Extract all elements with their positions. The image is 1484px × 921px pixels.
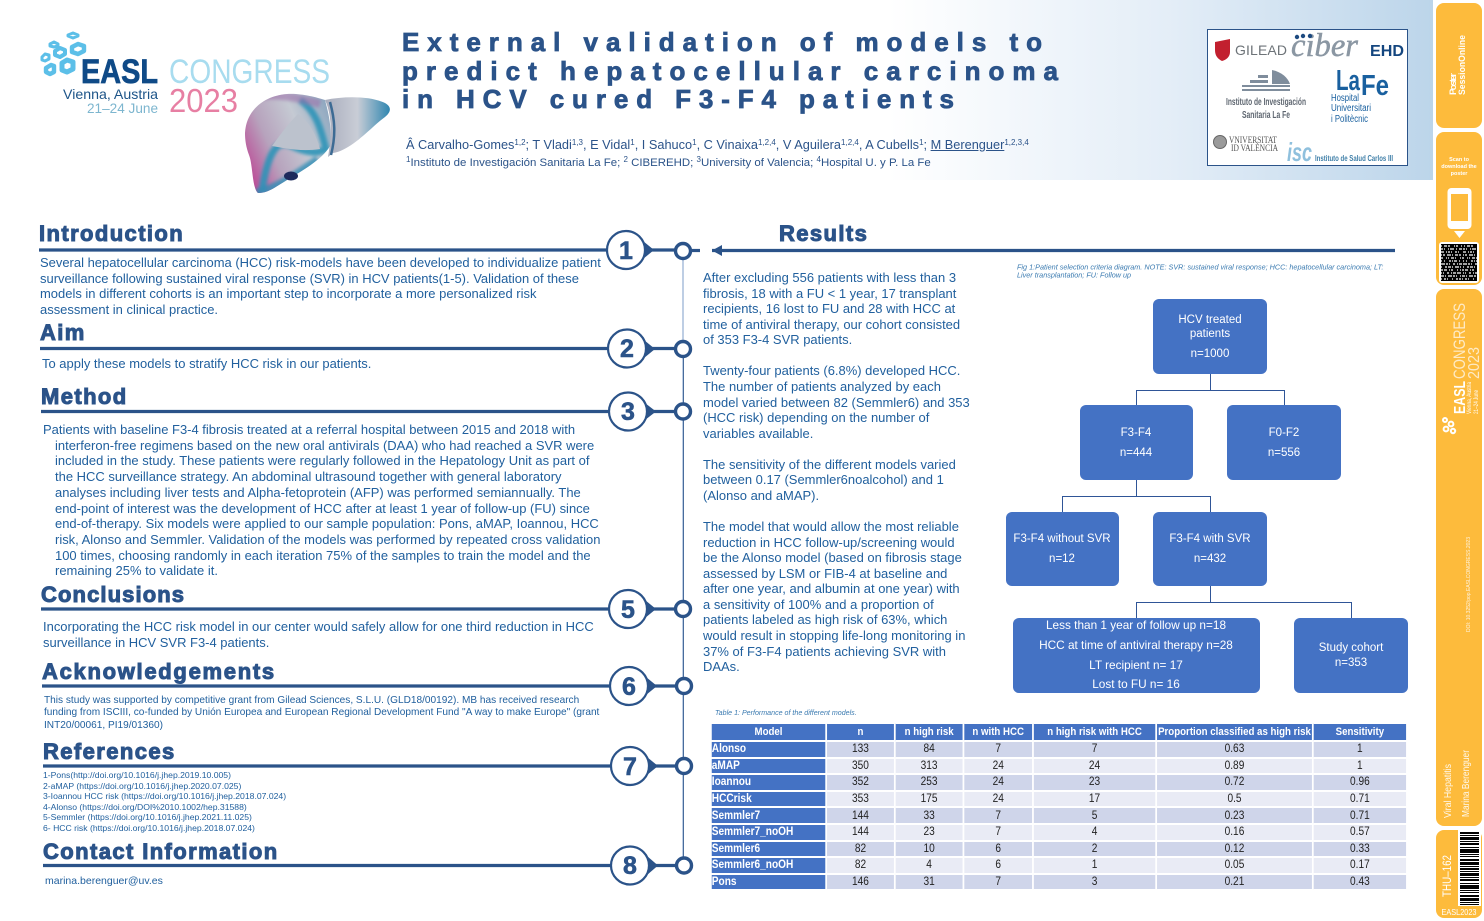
institutional logos box: [1208, 28, 1408, 167]
table: model performance: n with HCC: [972, 726, 1024, 738]
Instituto de Salud Carlos III: Instituto de Salud Carlos III: [1315, 154, 1393, 163]
EASL2023: EASL2023: [1442, 907, 1477, 917]
La Fe logo: Fe: [1361, 70, 1389, 102]
table: model performance: 0.89: [1225, 760, 1244, 772]
table caption: Table 1: Performance of the different models.: [715, 709, 857, 717]
Instituto de Investigacion text: Sanitaria La Fe: [1242, 110, 1290, 121]
EASL Congress logo: [42, 33, 330, 119]
text: results: After excluding 556 patients with less than 3: [703, 270, 956, 285]
dates: 21–24 June: [87, 100, 158, 116]
section marker 3: [609, 392, 690, 430]
text: acknowledgements: [44, 695, 600, 731]
text: results: 37% of F3-F4 patients achieving SVR with: [703, 644, 946, 658]
table: model performance: 31: [923, 876, 935, 888]
rotated congress branding: 21–24 June: [1474, 390, 1480, 414]
icon: EASL hexagons: [42, 33, 84, 74]
text: introduction: models in different cohorts is an important step to incorporate a more personalized risk: [40, 286, 536, 301]
topic: Viral Hepatitis: [1443, 764, 1454, 818]
text: results: The sensitivity of the different models varied: [703, 457, 956, 472]
text: method: remaining 25% to validate it.: [55, 563, 218, 578]
text: acknowledgements: funding from ISCIII, co-funded by Unión Europea and European Regional Development Fund "A way to make Europe" (grant: [44, 707, 599, 718]
sidebar tab: congress details: [1436, 289, 1483, 826]
table: model performance: 352: [852, 776, 869, 788]
patient selection flow diagram: [1006, 299, 1408, 693]
Universitat de Valencia: [1229, 135, 1278, 153]
heading: References: References: [43, 739, 176, 764]
box: F3-F4 without SVR: n=12: [1049, 553, 1075, 565]
icon: down arrow: [1454, 231, 1465, 238]
text: results: assessed by LSM or FIB-4 at baseline and: [703, 566, 947, 581]
year: 2023: [169, 82, 238, 119]
scan instruction: [1441, 157, 1477, 177]
text: results: Twenty-four patients (6.8%) developed HCC.: [703, 363, 960, 378]
table: model performance: n high risk with HCC: [1047, 726, 1142, 738]
icon: liver illustration: [245, 94, 390, 193]
section marker 2: [608, 330, 690, 368]
text: introduction: assessment in clinical practice.: [40, 302, 218, 317]
rotated congress branding: 2023: [1466, 347, 1483, 379]
section marker 1: 1: [619, 237, 633, 265]
text: results: recipients, 16 lost to FU and 28 with HCC at: [703, 301, 955, 316]
text: references: 1-Pons(http://doi.org/10.1016/j.jhep.2019.10.005): [43, 770, 231, 780]
text: results: (Alonso and aMAP).: [703, 488, 819, 503]
icon: ISCIII mark: isc: [1287, 137, 1312, 167]
table: model performance: 133: [852, 743, 869, 755]
table: model performance: 24: [993, 760, 1004, 772]
sidebar tab: poster session online: [1436, 3, 1482, 128]
text: conclusions: Incorporating the HCC risk model in our center would safely allow for one third reduction in HCC: [43, 619, 594, 634]
table: model performance: 313: [921, 760, 938, 772]
table: model performance: HCCrisk: [712, 793, 752, 805]
presenter: Marina Berenguer: [1461, 749, 1472, 817]
section marker 5: [609, 590, 690, 628]
text: references: 3-Ioannou HCC risk (https://doi.org/10.1016/j.jhep.2018.07.024): [43, 791, 286, 801]
poster number: THU–162: [1440, 855, 1454, 897]
text: references: 5-Semmler (https://doi.org/10.1016/j.jhep.2021.11.025): [43, 812, 252, 822]
table: model performance: aMAP: [712, 760, 740, 772]
figure caption: [1017, 262, 1383, 280]
table: model performance: 7: [1092, 743, 1097, 755]
text: introduction: surveillance following sustained viral response (SVR) in HCV patients(1-5). Validation of these: [40, 271, 579, 286]
icon: ciber dots: [1295, 34, 1312, 39]
icon: phone: [1448, 188, 1472, 229]
text: method: end-of-therapy. Six models were applied to our sample population: Pons, aMAP, Ioannou, HCC: [55, 516, 599, 531]
icon: Gilead shield: [1215, 39, 1230, 61]
section marker 6: 6: [622, 673, 636, 701]
table: model performance: 0.23: [1225, 810, 1244, 822]
table: model performance: n high risk: [905, 726, 954, 738]
section marker 7: 7: [623, 753, 637, 781]
rotated congress branding: EASL: [1452, 381, 1469, 414]
table: model performance: 0.71: [1350, 793, 1370, 805]
text: references: 4-Alonso (https://doi.org/DOI%2010.1002/hep.31588): [43, 802, 247, 812]
text: results: reduction in HCC follow-up/screening would: [703, 535, 955, 550]
La Fe logo: Hospital: [1331, 93, 1359, 104]
table: model performance: 7: [995, 876, 1001, 888]
text: introduction: [40, 255, 601, 317]
box: F3-F4 with SVR: F3-F4 with SVR: [1169, 533, 1251, 545]
box: F3-F4 without SVR: [1006, 512, 1119, 586]
table: model performance: n: [858, 726, 863, 738]
text: results: of 353 F3-4 SVR patients.: [703, 332, 852, 347]
table: model performance: 146: [852, 876, 869, 888]
rotated congress branding: CONGRESS: [1450, 303, 1469, 379]
section marker 7: [611, 747, 692, 785]
DOI: DOI: 10.3252/pop.EASLCONGRESS.2023: [1466, 537, 1472, 632]
box: study cohort: n=353: [1335, 657, 1367, 669]
title: External validation of models to: [402, 27, 1042, 57]
table: model performance: 3: [1092, 876, 1097, 888]
box: F3-F4 with SVR: [1153, 512, 1267, 586]
table: model performance: 1: [1357, 760, 1363, 772]
text: results: model varied between 82 (Semmler6) and 353: [703, 394, 970, 410]
La Fe logo: La: [1336, 65, 1361, 97]
box: study cohort: [1294, 618, 1408, 693]
section marker 5: 5: [621, 596, 635, 624]
table: model performance: 82: [855, 859, 866, 871]
table: model performance: 23: [1089, 776, 1100, 788]
heading: Aim: Aim: [40, 320, 86, 345]
table: model performance: 0.96: [1350, 776, 1370, 788]
table: model performance: Semmler7: [712, 810, 760, 822]
text: results: patients labeled as high risk of 63%, which: [703, 612, 947, 627]
icon: institute building: [1242, 70, 1290, 91]
section marker 8: 8: [623, 852, 637, 880]
table: model performance: 144: [852, 810, 869, 822]
EASL wordmark: EASL: [81, 53, 158, 91]
Universitat de Valencia: ID VALÈNCIA: [1231, 143, 1278, 153]
box: HCV treated patients: patients: [1190, 328, 1230, 340]
section marker 1: [607, 231, 690, 269]
table: model performance: 0.17: [1350, 859, 1370, 871]
text: method: interferon-free regimens based on the new oral antivirals (DAA) who had reached a SVR were: [55, 438, 594, 453]
text: method: 100 times, choosing randomly in each iteration 75% of the samples to train the model and the: [55, 548, 591, 563]
box: F3-F4: F3-F4: [1121, 427, 1152, 439]
text: results: variables available.: [703, 426, 813, 441]
section marker 8: [611, 846, 692, 884]
table: model performance: 4: [926, 859, 932, 871]
box: HCV treated patients: [1153, 299, 1267, 374]
section marker 2: 2: [620, 335, 634, 363]
heading: Introduction: Introduction: [39, 221, 184, 246]
arrow: results pointer: [712, 245, 722, 256]
text: results: time of antiviral therapy, our cohort consisted: [703, 317, 960, 332]
box: exclusions: [1013, 618, 1260, 693]
table: model performance: 10: [923, 843, 935, 855]
box: exclusions: HCC at time of antiviral therapy n=28: [1039, 638, 1233, 652]
scan instruction: Scan to: [1449, 157, 1470, 163]
table: model performance: 0.5: [1227, 793, 1242, 805]
text: results: fibrosis, 18 with a FU < 1 year, 17 transplant: [703, 286, 956, 301]
scan instruction: download the: [1441, 164, 1477, 170]
Instituto de Investigacion text: Instituto de Investigación: [1226, 97, 1306, 108]
table: model performance: [712, 723, 1406, 889]
Universitat de Valencia: VNIVERSITAT: [1229, 135, 1277, 145]
table: model performance: 0.21: [1225, 876, 1244, 888]
EHD: EHD: [1370, 43, 1404, 60]
table: model performance: 0.12: [1225, 843, 1244, 855]
table: model performance: Sensitivity: [1336, 726, 1384, 738]
text: results: [703, 270, 970, 674]
text: results: a sensitivity of 100% and a proportion of: [703, 597, 934, 612]
box: exclusions: LT recipient n= 17: [1089, 658, 1183, 672]
table: model performance: 23: [923, 826, 935, 838]
text: results: would result in stopping life-long monitoring in: [703, 628, 965, 643]
table: model performance: 0.63: [1225, 743, 1244, 755]
text: results: be the Alonso model (based on fibrosis stage: [703, 550, 962, 565]
box: HCV treated patients: HCV treated: [1178, 314, 1242, 326]
ciber: ciber: [1291, 28, 1358, 64]
table: model performance: 6: [995, 859, 1001, 871]
table: model performance: 84: [923, 743, 935, 755]
figure caption: Fig 1:Patient selection criteria diagram. NOTE: SVR: sustained viral response; HCC: hepatocellular carcinoma; LT:: [1017, 262, 1383, 272]
figure caption: Liver transplantation; FU: Follow up: [1017, 270, 1131, 280]
text: method: [43, 422, 600, 578]
box: F3-F4 without SVR: F3-F4 without SVR: [1013, 533, 1111, 545]
heading: Method: Method: [41, 384, 128, 409]
table: model performance: Alonso: [712, 743, 746, 755]
table: model performance: Semmler6_noOH: [712, 859, 793, 871]
table: model performance: Semmler7_noOH: [712, 826, 793, 838]
box: exclusions: Lost to FU n= 16: [1092, 677, 1180, 691]
text: contact: marina.berenguer@uv.es: [45, 875, 163, 887]
text: acknowledgements: This study was supported by competitive grant from Gilead Sciences, S.L.U. (GLD18/00192). MB has received research: [44, 695, 579, 706]
QR code: [1439, 242, 1479, 283]
text: method: the HCC surveillance strategy. An abdominal ultrasound together with general laboratory: [55, 469, 562, 484]
table: model performance: 1: [1092, 859, 1097, 871]
header background band: [0, 0, 1433, 180]
title: predict hepatocellular carcinoma: [402, 56, 1059, 86]
heading: Conclusions: Conclusions: [41, 582, 185, 607]
authors: Â Carvalho-Gomes1,2; T Vladi1,3, E Vidal1, I Sahuco1, C Vinaixa1,2,4, V Aguilera1,2,4, A Cubells1; M Berenguer1,2,3,4: [406, 137, 1029, 152]
flow connectors: [1062, 374, 1352, 618]
table: model performance: 2: [1092, 843, 1097, 855]
box: F0-F2: [1227, 405, 1341, 480]
box: F3-F4: [1080, 405, 1193, 480]
La Fe logo: Universitari: [1331, 103, 1371, 114]
table: model performance: 82: [855, 843, 866, 855]
table: model performance: 33: [923, 810, 935, 822]
icon: university seal: [1214, 136, 1226, 148]
sidebar tab: scan to download: [1436, 132, 1482, 285]
affiliations: 1Instituto de Investigación Sanitaria La Fe; 2 CIBEREHD; 3University of Valencia; 4Hospital U. y P. La Fe: [406, 154, 931, 168]
table: model performance: 0.33: [1350, 843, 1370, 855]
Gilead: GILEAD: [1235, 42, 1287, 58]
La Fe logo: i Politècnic: [1331, 114, 1368, 125]
table: model performance: 0.43: [1350, 876, 1370, 888]
section marker 3: 3: [621, 398, 635, 426]
box: F3-F4 with SVR: n=432: [1194, 553, 1226, 565]
text: results: (HCC risk) depending on the number of: [703, 410, 929, 425]
table: model performance: 17: [1089, 793, 1100, 805]
text: references: 2-aMAP (https://doi.org/10.1016/j.jhep.2020.07.025): [43, 781, 241, 791]
text: introduction: Several hepatocellular carcinoma (HCC) risk-models have been developed to individualize patient: [40, 255, 601, 270]
text: acknowledgements: INT20/00061, PI19/01360): [44, 720, 163, 731]
table: model performance: Semmler6: [712, 843, 760, 855]
text: results: between 0.17 (Semmler6noalcohol) and 1: [703, 472, 944, 487]
table: model performance: 5: [1092, 810, 1097, 822]
sidebar tab: poster number and barcode: [1436, 830, 1482, 918]
table: model performance: 0.57: [1350, 826, 1370, 838]
table: model performance: 7: [995, 826, 1001, 838]
table: model performance: 24: [1089, 760, 1100, 772]
CONGRESS wordmark: CONGRESS: [169, 53, 330, 91]
title: [402, 27, 1059, 114]
heading: Acknowledgements: Acknowledgements: [42, 659, 276, 684]
rotated congress branding: Vienna, Austria: [1467, 381, 1473, 414]
box: study cohort: Study cohort: [1319, 642, 1384, 654]
table: model performance: 1: [1357, 743, 1363, 755]
text: results: The number of patients analyzed by each: [703, 379, 941, 394]
table: model performance: 0.05: [1225, 859, 1244, 871]
text: method: included in the study. These patients were regularly followed in the Hepatology Unit as part of: [55, 453, 589, 468]
text: conclusions: [43, 619, 594, 650]
table: model performance: 175: [921, 793, 938, 805]
table: model performance: 4: [1092, 826, 1097, 838]
barcode: [1458, 830, 1481, 906]
scan instruction: poster: [1451, 171, 1468, 177]
text: results: after one year, and albumin at one year) with: [703, 581, 960, 596]
text: references: 6- HCC risk (https://doi.org/10.1016/j.jhep.2018.07.024): [43, 823, 255, 833]
text: method: analyses including liver tests and Alpha-fetoprotein (AFP) was performed semiannually. The: [55, 485, 581, 500]
table: model performance: 253: [921, 776, 938, 788]
table: model performance: Pons: [712, 876, 737, 888]
table: model performance: 0.72: [1225, 776, 1244, 788]
box: exclusions: Less than 1 year of follow up n=18: [1046, 618, 1226, 632]
table: model performance: 350: [852, 760, 869, 772]
box: F0-F2: n=556: [1268, 447, 1300, 459]
box: HCV treated patients: n=1000: [1191, 348, 1229, 360]
sidebar tab: poster session online: SessionOnline: [1457, 35, 1467, 95]
table: model performance: 353: [852, 793, 869, 805]
title: in HCV cured F3-F4 patients: [402, 84, 954, 114]
table: model performance: 144: [852, 826, 869, 838]
text: method: risk, Alonso and Semmler. Validation of the models was performed by repeated cross validation: [55, 532, 600, 547]
box: F3-F4: n=444: [1120, 447, 1153, 459]
table: model performance: 0.71: [1350, 810, 1370, 822]
text: conclusions: surveillance in HCV SVR F3-4 patients.: [43, 635, 269, 650]
text: results: DAAs.: [703, 659, 740, 674]
text: method: end-point of interest was the development of HCC after at least 1 year of follow-up (FU) since: [55, 501, 590, 516]
text: method: Patients with baseline F3-4 fibrosis treated at a referral hospital between 2015 and 2018 with: [43, 422, 575, 437]
heading: Contact Information: Contact Information: [43, 839, 279, 864]
table: model performance: 24: [993, 793, 1004, 805]
box: F0-F2: F0-F2: [1269, 427, 1299, 439]
La Fe logo: [1331, 65, 1389, 125]
text: results: The model that would allow the most reliable: [703, 519, 959, 534]
heading: Results: Results: [779, 221, 868, 246]
table: model performance: 6: [995, 843, 1001, 855]
table: model performance: 0.16: [1225, 826, 1244, 838]
table: model performance: 7: [995, 743, 1001, 755]
table: model performance: Ioannou: [712, 776, 751, 788]
table: model performance: Proportion classified as high risk: [1158, 726, 1311, 738]
section marker 6: [610, 667, 692, 705]
rotated congress branding: [1443, 303, 1483, 433]
table: model performance: Model: [755, 726, 783, 738]
text: references: [43, 770, 286, 833]
table: model performance: 24: [993, 776, 1004, 788]
location: Vienna, Austria: [63, 86, 158, 102]
text: aim: To apply these models to stratify HCC risk in our patients.: [42, 356, 371, 371]
sidebar tab: poster session online: Poster: [1448, 73, 1459, 95]
timeline spine and connectors: [39, 245, 1395, 866]
table: model performance: 7: [995, 810, 1001, 822]
Instituto de Investigacion text: [1226, 97, 1306, 121]
